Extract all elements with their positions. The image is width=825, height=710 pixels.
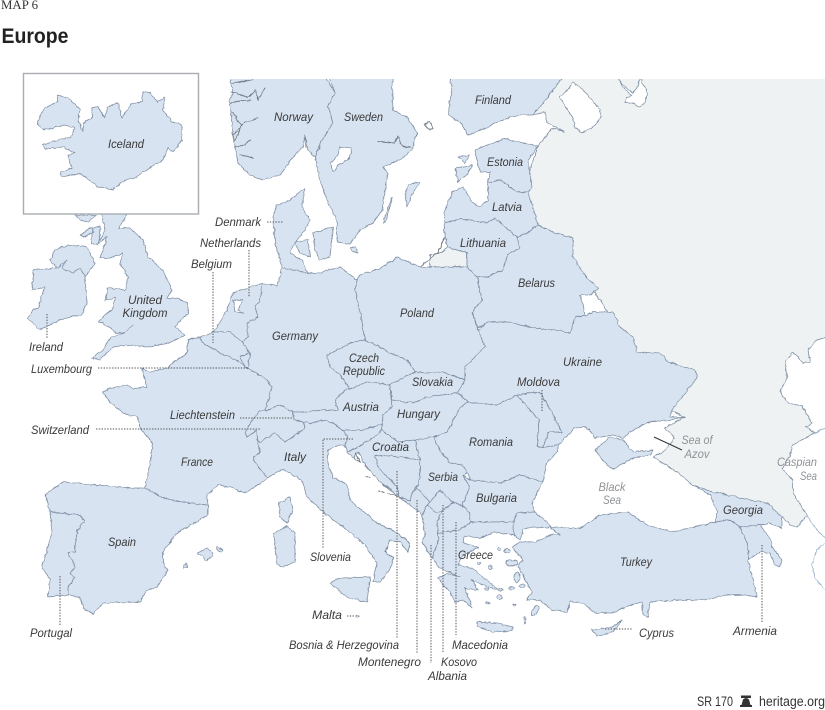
Georgia: [693, 485, 782, 528]
Sicily: [330, 577, 370, 602]
callout: Macedonia: Macedonia: [452, 638, 508, 652]
Caspian shore lines: [807, 428, 825, 590]
Adriatic islands: [354, 453, 397, 496]
Albania: [422, 505, 443, 558]
Bulgaria: [462, 475, 543, 522]
Austria: [293, 382, 392, 430]
Netherlands: [213, 283, 262, 342]
Cyprus: [592, 620, 622, 636]
Balearic islands: [183, 547, 223, 568]
label: Poland: Poland: [400, 306, 434, 320]
callout: Albania: [427, 545, 467, 683]
label: Croatia: Croatia: [372, 440, 409, 454]
callout: Armenia: [732, 545, 777, 638]
Italy: [253, 420, 410, 582]
Armenia: [740, 525, 782, 567]
label: Finland: Finland: [475, 93, 511, 107]
Hungary: [382, 387, 468, 442]
label: Slovakia: Slovakia: [412, 375, 453, 389]
icon: bell: [740, 696, 752, 707]
Bosnia and Herzegovina: [375, 455, 420, 501]
Northern Ireland border: [58, 260, 85, 277]
country labels: [108, 93, 763, 569]
footer: [697, 694, 825, 709]
inset frame: [24, 74, 198, 214]
callout: Netherlands: [200, 236, 261, 297]
label: Norway: Norway: [274, 110, 314, 124]
label: Georgia: Georgia: [723, 503, 763, 517]
callout: Belgium: [191, 257, 232, 343]
Norway: [228, 70, 335, 180]
label: Bulgaria: Bulgaria: [476, 491, 517, 505]
Montenegro: [399, 488, 430, 515]
label: Caspian Sea: Caspian: [777, 455, 817, 469]
label: Germany: Germany: [272, 329, 319, 343]
callout: Luxembourg: Luxembourg: [31, 362, 92, 376]
label: France: France: [181, 455, 213, 469]
callout: Ireland: [29, 314, 63, 354]
Croatia: [347, 430, 420, 497]
leader labels: [29, 215, 777, 683]
Portugal: [42, 512, 84, 597]
callout: Slovenia: [310, 439, 353, 564]
Iceland label: Iceland: [108, 137, 144, 151]
label: Sweden: Sweden: [344, 110, 383, 124]
label: Sea of Azov: Sea of: [682, 433, 714, 447]
callout: Malta: Malta: [312, 608, 342, 622]
label: Czech Republic: Czech: [349, 351, 379, 365]
Denmark: [273, 188, 358, 273]
Corsica and Sardinia: [274, 497, 295, 567]
Swedish lake detail: [378, 136, 410, 147]
land shapes: [28, 70, 825, 636]
Moldova: [517, 392, 562, 448]
Macedonia: [437, 503, 470, 533]
Slovenia: [343, 424, 382, 452]
callout: Switzerland: Switzerland: [31, 423, 89, 437]
Lake Onega: [618, 78, 648, 107]
label: Latvia: Latvia: [492, 200, 522, 214]
Russia region: [520, 70, 825, 527]
Sweden: [315, 70, 417, 244]
France: [103, 337, 272, 505]
callout: Denmark: Denmark: [215, 215, 262, 229]
label: Estonia: Estonia: [487, 155, 523, 169]
Kaliningrad: [430, 247, 467, 267]
callout: Moldova: Moldova: [517, 375, 560, 389]
label: Austria: Austria: [342, 400, 379, 414]
Norwegian fjords: [231, 80, 306, 158]
Belgium: [200, 332, 250, 367]
callout: Macedonia: [452, 522, 508, 652]
callout: Montenegro: Montenegro: [358, 655, 421, 669]
Finland: [448, 79, 562, 136]
Spain: [45, 482, 208, 614]
Ireland: [28, 245, 95, 330]
label: Caspian Sea: Sea: [800, 469, 817, 483]
label: Lithuania: Lithuania: [460, 236, 506, 250]
callout: Portugal: [30, 576, 72, 640]
Lake Vanern: [330, 147, 352, 172]
callout: Cyprus: Cyprus: [639, 626, 674, 640]
callout: Kosovo: Kosovo: [441, 655, 477, 669]
Romania: [433, 395, 558, 483]
label: Turkey: Turkey: [620, 555, 653, 569]
label: Black Sea: Sea: [603, 493, 621, 507]
Germany: [242, 267, 365, 412]
label: Ukraine: Ukraine: [563, 355, 602, 369]
callout: Armenia: Armenia: [732, 624, 777, 638]
Luxembourg: [240, 353, 250, 368]
Curonian spit: [421, 238, 445, 266]
label: Serbia: Serbia: [428, 470, 458, 484]
label: United Kingdom: Kingdom: [122, 306, 168, 320]
label: Hungary: Hungary: [397, 407, 441, 421]
label: Italy: Italy: [284, 450, 307, 464]
callout: Liechtenstein: [170, 408, 293, 422]
callout: Netherlands: Netherlands: [200, 236, 261, 250]
Serbia: [415, 437, 470, 505]
callout: Portugal: Portugal: [30, 626, 72, 640]
Estonia: [455, 139, 538, 192]
Belarus: [472, 225, 598, 333]
label: Sea of Azov: Azov: [684, 447, 710, 461]
inset: Iceland: [24, 74, 198, 214]
Czech Republic: [327, 340, 415, 389]
Switzerland: [245, 405, 305, 442]
callout: Cyprus: [605, 626, 674, 640]
Iceland shape: [37, 92, 182, 190]
callout: Bosnia and Herzegovina: Bosnia & Herzegovina: [289, 638, 399, 652]
label: Romania: Romania: [469, 435, 513, 449]
Ukraine: [458, 312, 697, 469]
Aegean islands: [478, 548, 541, 624]
callout: Albania: Albania: [427, 669, 467, 683]
Aland islands: [424, 121, 433, 130]
label: Black Sea: Black: [598, 480, 626, 494]
Slovakia: [390, 372, 465, 403]
Latvia: [444, 180, 538, 237]
Malta: [355, 615, 359, 617]
report number: SR 170: [697, 694, 733, 709]
Poland: [355, 257, 485, 380]
Kosovo: [427, 490, 453, 513]
callout: Malta: [312, 608, 355, 622]
land masses: [28, 70, 825, 636]
label: United Kingdom: United: [128, 293, 162, 307]
Lithuania: [444, 218, 520, 277]
Greece: [432, 518, 517, 632]
callout: Belgium: Belgium: [191, 257, 232, 271]
Swedish islands: [383, 182, 420, 223]
label: Belarus: Belarus: [518, 276, 555, 290]
callout: Liechtenstein: Liechtenstein: [170, 408, 235, 422]
label: Greece: Greece: [458, 548, 493, 562]
label: Spain: Spain: [108, 535, 136, 549]
callout: Slovenia: Slovenia: [310, 550, 351, 564]
callout: Ireland: Ireland: [29, 340, 63, 354]
callout: Moldova: [517, 375, 560, 412]
United Kingdom: [92, 205, 188, 360]
IJsselmeer: [233, 300, 243, 313]
Kerch crossing line: [654, 437, 682, 450]
title: Europe: [2, 25, 68, 48]
Turkey: [512, 512, 757, 617]
sea labels: [598, 433, 817, 507]
Lake Ladoga: [560, 82, 601, 133]
Scottish islands: [75, 215, 100, 244]
label: Czech Republic: Republic: [343, 364, 385, 378]
